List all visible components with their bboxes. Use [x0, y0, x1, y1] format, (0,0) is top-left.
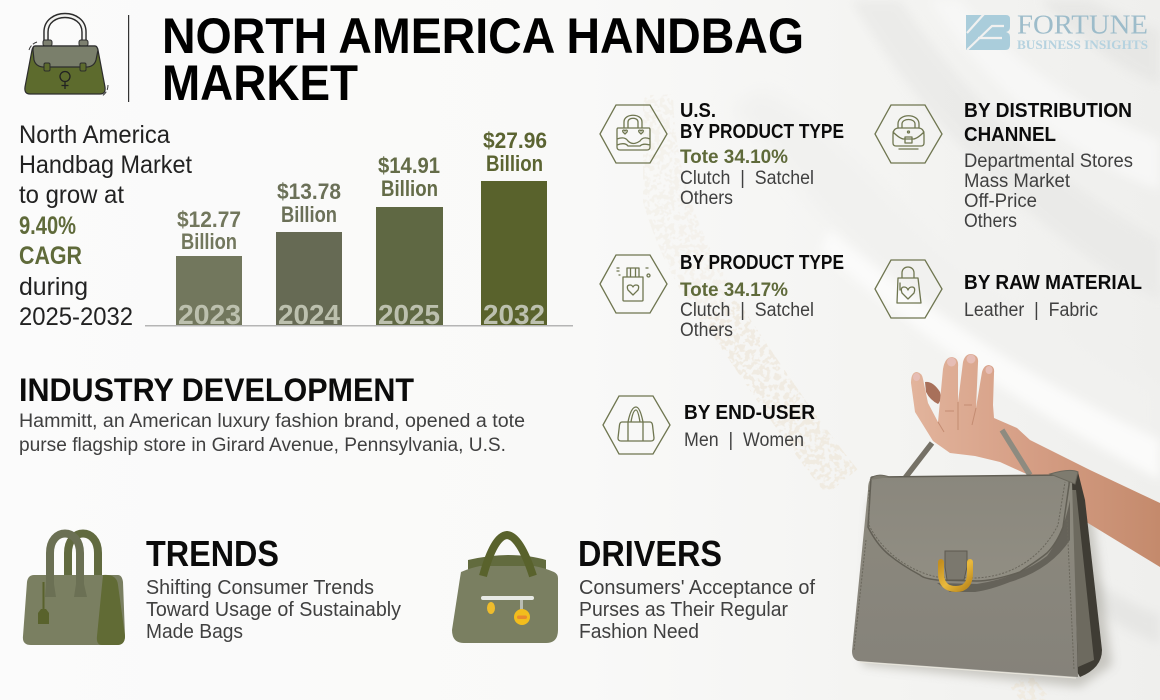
panel: by product type: Others [680, 320, 733, 341]
panel: U.S. by product type: Tote 34.10% [680, 147, 788, 168]
panel: by end-user [603, 396, 816, 454]
panel: U.S. by product type: Others [680, 188, 733, 209]
buckle strap [945, 551, 967, 580]
bar 2025: $14.91 [378, 153, 440, 178]
icon: purse in hexagon [875, 105, 942, 163]
panel: by product type: Tote 34.17% [680, 280, 788, 301]
decorative splatter streak [650, 95, 1040, 700]
gold buckle [941, 562, 970, 589]
panel: by product type [600, 252, 844, 341]
panel: by distribution channel: Off-Price [964, 191, 1037, 212]
flap shadow [937, 500, 1070, 592]
bag base [860, 662, 1076, 678]
panel: trends: Made Bags [146, 621, 243, 643]
panel: U.S. by product type [600, 100, 844, 209]
logo: Fortune Business Insights: BUSINESS INSIGHTS [1017, 37, 1148, 52]
title: MARKET [162, 55, 358, 111]
CAGR text block: CAGR [19, 242, 82, 270]
bag body [852, 476, 1078, 677]
panel: U.S. by product type: Clutch | Satchel [680, 168, 814, 189]
CAGR text block: North America [19, 121, 170, 149]
icon: handbag with female symbol [25, 16, 108, 96]
panel: by end-user: BY END-USER [684, 402, 816, 424]
handle straps [905, 443, 932, 478]
icon: heart tote in hexagon [600, 255, 667, 313]
panel: trends: Toward Usage of Sustainably [146, 599, 401, 621]
panel: by raw material: BY RAW MATERIAL [964, 272, 1142, 294]
panel: trends: Shifting Consumer Trends [146, 577, 374, 599]
icon: green tote bag [23, 534, 125, 645]
title: NORTH AMERICA HANDBAG [162, 8, 804, 64]
panel: by distribution channel: BY DISTRIBUTION [964, 100, 1132, 122]
title [162, 8, 804, 111]
bar 2023: $12.77 [177, 207, 241, 232]
flap corners and handle knots [870, 470, 1078, 484]
finger shading [938, 402, 976, 432]
bag flap [868, 475, 1069, 581]
panel: drivers: Purses as Their Regular [579, 599, 788, 621]
hand and arm [911, 354, 1160, 567]
bar 2023: 2023 [178, 299, 241, 330]
panel: by raw material: Leather | Fabric [964, 300, 1098, 321]
icon: shopping bag in hexagon [875, 260, 942, 318]
bar 2032: Billion [486, 151, 543, 176]
CAGR text block: to grow at [19, 181, 124, 209]
bar 2032: 2032 [483, 299, 545, 330]
bar 2024: 2024 [278, 299, 340, 330]
divider [128, 15, 129, 102]
bar 2024: $13.78 [277, 179, 341, 204]
bar 2024: Billion [281, 202, 337, 227]
bar 2023 [176, 207, 242, 330]
panel: by distribution channel [875, 100, 1133, 232]
bar 2032 [481, 128, 547, 330]
CAGR text block: 2025-2032 [19, 303, 133, 331]
body stitching [854, 520, 1074, 670]
CAGR text block: Handbag Market [19, 151, 192, 179]
rear finger [925, 382, 941, 404]
panel: industry development: INDUSTRY DEVELOPMENT [19, 372, 414, 408]
panel: by end-user: Men | Women [684, 430, 804, 451]
bar 2025: 2025 [378, 299, 440, 330]
panel: industry development: purse flagship store in Girard Avenue, Pennsylvania, U.S. [19, 435, 506, 456]
panel: drivers [452, 533, 815, 643]
panel: industry development [19, 372, 525, 456]
logo: Fortune Business Insights: FORTUNE [1017, 10, 1148, 40]
bar chart [145, 128, 573, 330]
panel: by product type: Clutch | Satchel [680, 300, 814, 321]
bar 2032: $27.96 [483, 128, 547, 153]
bag side gusset [1068, 472, 1102, 677]
panel: drivers: DRIVERS [578, 533, 722, 574]
CAGR text block: during [19, 273, 88, 301]
icon: tote in hexagon [600, 105, 667, 163]
fingernails [913, 354, 992, 381]
bar 2024 [276, 179, 342, 330]
bag shadow [862, 500, 1112, 687]
CAGR text block [19, 121, 192, 331]
panel: by distribution channel: Departmental Stores [964, 151, 1133, 172]
panel: by distribution channel: Others [964, 211, 1017, 232]
panel: drivers: Fashion Need [579, 621, 699, 643]
photo: hand holding handbag [852, 354, 1160, 687]
bar 2023: Billion [181, 229, 237, 254]
bar 2025: Billion [381, 176, 438, 201]
panel: by distribution channel: Mass Market [964, 171, 1071, 192]
panel: by raw material [875, 260, 1142, 321]
panel: drivers: Consumers' Acceptance of [579, 577, 815, 599]
bar 2025 [376, 153, 443, 330]
icon: duffel bag in hexagon [603, 396, 670, 454]
logo: Fortune Business Insights [966, 10, 1148, 52]
CAGR text block: 9.40% [19, 212, 76, 240]
panel: by product type: BY PRODUCT TYPE [680, 252, 844, 274]
panel: U.S. by product type: U.S. [680, 100, 716, 122]
panel: industry development: Hammitt, an American luxury fashion brand, opened a tote [19, 411, 525, 432]
icon: green handbag with zip [452, 535, 558, 643]
panel: by distribution channel: CHANNEL [964, 124, 1056, 146]
panel: trends: TRENDS [146, 533, 279, 574]
panel: trends [23, 533, 401, 645]
flap stitching [869, 482, 1065, 578]
panel: U.S. by product type: BY PRODUCT TYPE [680, 121, 844, 143]
